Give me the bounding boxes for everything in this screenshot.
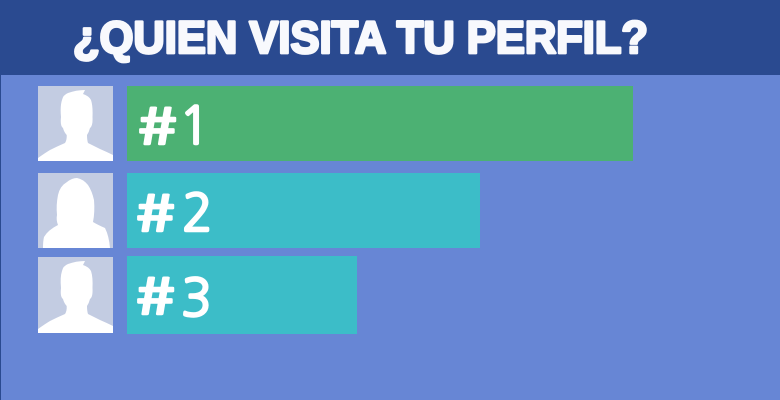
rank label 1: 1 [179, 101, 210, 152]
bar 2 [127, 173, 480, 248]
rank label 2: 2 [182, 188, 213, 239]
rank label 3: # [136, 256, 175, 329]
rank label 2: # [136, 173, 175, 246]
avatar 2: female silhouette [38, 173, 113, 248]
bar 3 [127, 256, 357, 334]
bar 1 [127, 86, 633, 161]
header band [0, 0, 780, 75]
avatar 3: male silhouette [38, 257, 113, 333]
rank label 3 [136, 256, 212, 329]
rank label 1 [138, 86, 210, 159]
rank label 3: 3 [181, 273, 212, 324]
title: ¿QUIEN VISITA TU PERFIL? [73, 12, 648, 63]
rank label 2 [136, 173, 213, 246]
rank label 1: # [138, 86, 177, 159]
avatar 1: male silhouette [38, 86, 113, 161]
